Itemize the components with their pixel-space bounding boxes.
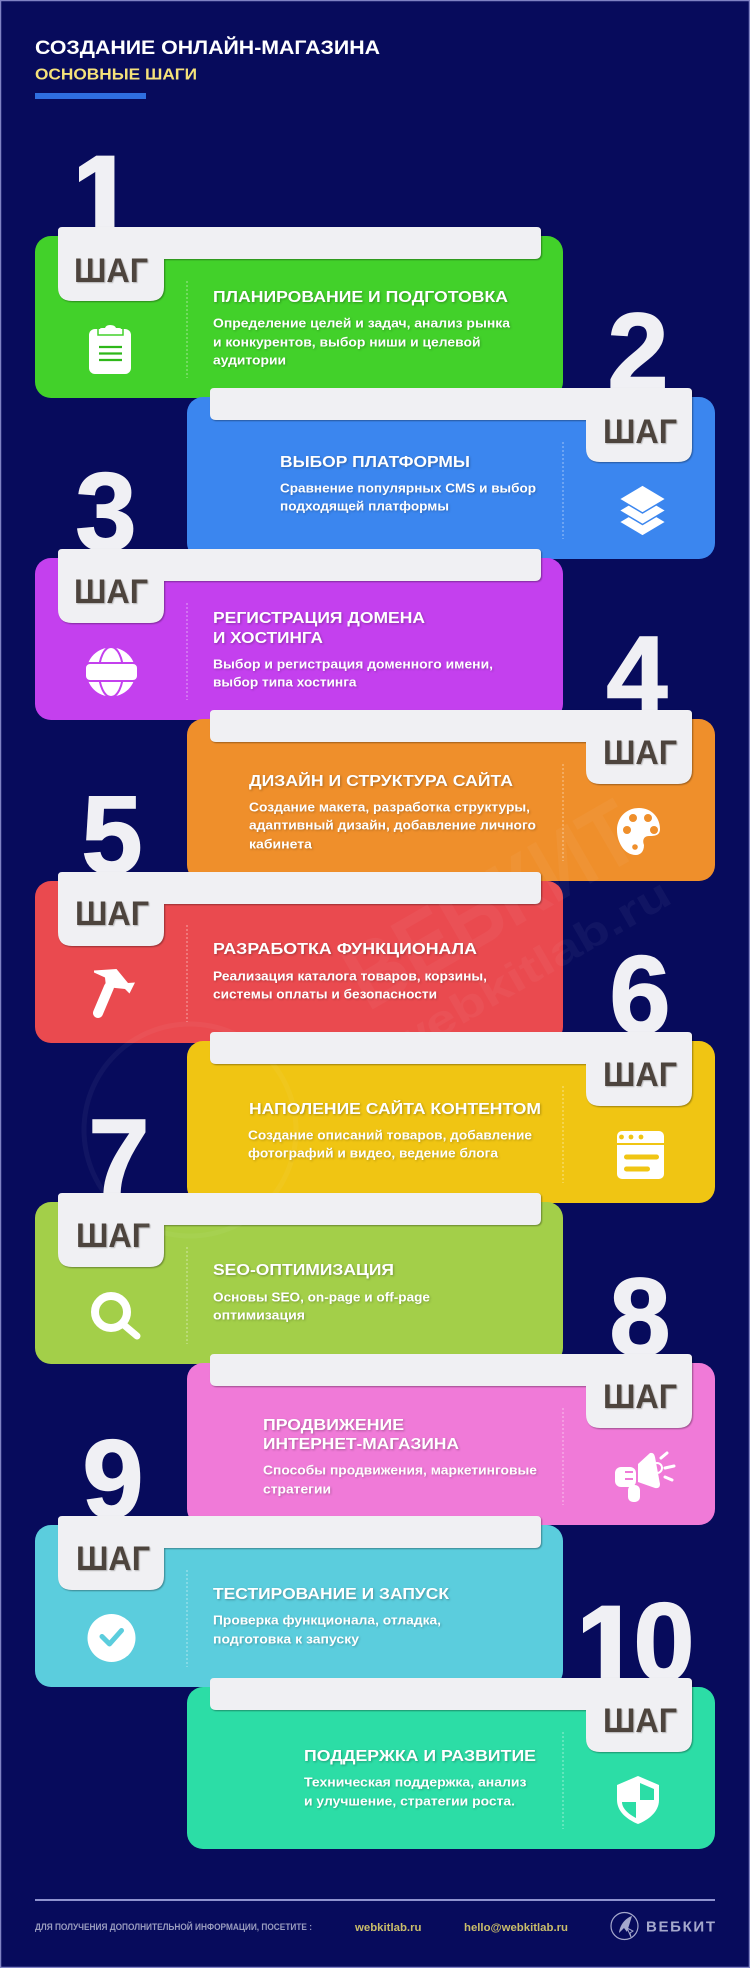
icon: hammer [94,969,135,1013]
description: Проверка функционала, отладка, [213,1614,441,1628]
footer [35,1899,715,1940]
step number 3: 3 [75,451,137,574]
description [304,1776,526,1808]
heading [263,1417,459,1453]
panel: step 10 [187,1575,715,1849]
description [263,1464,537,1496]
description: аудитории [213,354,286,368]
description [248,1128,532,1160]
card background [35,558,563,720]
description: Техническая поддержка, анализ [304,1776,526,1790]
step tab [210,710,692,784]
card background [187,397,715,559]
step label: ШАГ [603,1056,677,1094]
step label: ШАГ [603,1702,677,1740]
heading [213,610,425,647]
card background [187,719,715,881]
description: Сравнение популярных CMS и выбор [280,482,536,496]
icon: clipboard [89,325,131,374]
card background [35,1525,563,1687]
card background [187,1041,715,1203]
step number 9: 9 [82,1418,144,1541]
website: webkitlab.ru [354,1922,422,1934]
panel: step 6 [187,934,715,1203]
heading: ВЫБОР ПЛАТФОРМЫ [280,454,470,471]
card background [35,881,563,1043]
heading: ПРОДВИЖЕНИЕ [263,1417,404,1434]
step tab [210,388,692,462]
watermark [84,781,679,1236]
header [35,37,380,99]
step number 4: 4 [606,614,668,737]
icon: palette [617,808,660,855]
description: стратегии [263,1482,331,1496]
description [213,658,493,690]
watermark: ВЕБКИТ [327,781,655,1029]
step label: ШАГ [76,1217,150,1255]
card background [35,1202,563,1364]
description: оптимизация [213,1308,305,1322]
heading: ТЕСТИРОВАНИЕ И ЗАПУСК [213,1586,450,1603]
panel: step 5 [35,774,563,1043]
step tab [210,1032,692,1106]
step number 7: 7 [88,1097,150,1220]
icon: megaphone [615,1453,674,1502]
description: Основы SEO, on-page и off-page [213,1290,430,1304]
email: hello@webkitlab.ru [464,1922,568,1934]
logo: ВЕБКИТ [646,1918,715,1936]
panel: step 3 [35,451,563,720]
step tab [210,1678,692,1752]
step label: ШАГ [603,1378,677,1416]
description: подготовка к запуску [213,1632,359,1646]
step tab [210,1354,692,1428]
description: Определение целей и задач, анализ рынка [213,316,511,330]
description: Создание описаний товаров, добавление [248,1128,532,1142]
title: СОЗДАНИЕ ОНЛАЙН-МАГАЗИНА [35,37,380,59]
step tab [58,872,541,946]
watermark: webkitlab.ru [377,869,679,1070]
step label: ШАГ [76,1540,150,1578]
description: системы оплаты и безопасности [213,988,437,1002]
step number 6: 6 [609,934,671,1057]
description [213,1614,441,1646]
description: Реализация каталога товаров, корзины, [213,970,487,984]
heading: ИНТЕРНЕТ-МАГАЗИНА [263,1436,459,1453]
header accent bar [35,93,146,99]
icon: magnifier [95,1296,137,1336]
step number 1: 1 [63,125,140,282]
step tab [58,1516,541,1590]
icon: check circle [88,1614,136,1662]
heading: ПЛАНИРОВАНИЕ И ПОДГОТОВКА [213,289,508,306]
description: и конкурентов, выбор ниши и целевой [213,336,480,350]
description: адаптивный дизайн, добавление личного [249,818,536,832]
step label: ШАГ [603,413,677,451]
heading: НАПОЛЕНИЕ САЙТА КОНТЕНТОМ [249,1100,541,1118]
step label: ШАГ [74,573,148,611]
icon: layers [619,485,666,536]
card background [187,1687,715,1849]
description: подходящей платформы [280,500,449,514]
step tab [58,227,541,301]
heading: РЕГИСТРАЦИЯ ДОМЕНА [213,610,425,627]
card background [187,1363,715,1525]
icon: browser window [617,1131,664,1179]
step number 10: 0 [633,1581,695,1704]
description [213,1290,430,1322]
step label: ШАГ [74,252,148,290]
step label: ШАГ [75,895,149,933]
heading: И ХОСТИНГА [213,630,323,647]
step number 5: 5 [81,774,143,897]
description [213,970,487,1002]
heading: ПОДДЕРЖКА И РАЗВИТИЕ [304,1748,536,1765]
step number 2: 2 [607,291,669,414]
step label: ШАГ [603,734,677,772]
panel: step 8 [187,1256,715,1525]
subtitle: ОСНОВНЫЕ ШАГИ [35,66,197,84]
step tab [58,1193,541,1267]
description: и улучшение, стратегии роста. [304,1794,515,1808]
description: выбор типа хостинга [213,676,358,690]
description: Способы продвижения, маркетинговые [263,1464,537,1478]
description [249,800,536,852]
description: фотографий и видео, ведение блога [248,1146,499,1160]
heading: SEO-ОПТИМИЗАЦИЯ [213,1262,394,1279]
logo [611,1912,715,1940]
icon: globe [85,647,138,697]
heading: РАЗРАБОТКА ФУНКЦИОНАЛА [213,941,477,958]
footer note: ДЛЯ ПОЛУЧЕНИЯ ДОПОЛНИТЕЛЬНОЙ ИНФОРМАЦИИ, ПОСЕТИТЕ : [35,1921,312,1932]
description: Создание макета, разработка структуры, [249,800,530,814]
panel: step 7 [35,1097,563,1364]
description [213,316,511,368]
step number 10 [583,1602,691,1678]
description: Выбор и регистрация доменного имени, [213,658,493,672]
panel: step 4 [187,614,715,881]
heading: ДИЗАЙН И СТРУКТУРА САЙТА [249,772,513,790]
step tab [58,549,541,623]
step number 8: 8 [609,1256,671,1379]
step number 10: 1 [568,1575,646,1732]
panel: step 1 [35,156,563,398]
description [280,482,536,514]
icon: shield [617,1776,659,1824]
description: кабинета [249,838,313,852]
card background [35,236,563,398]
panel: step 2 [187,291,715,559]
panel: step 9 [35,1418,563,1687]
